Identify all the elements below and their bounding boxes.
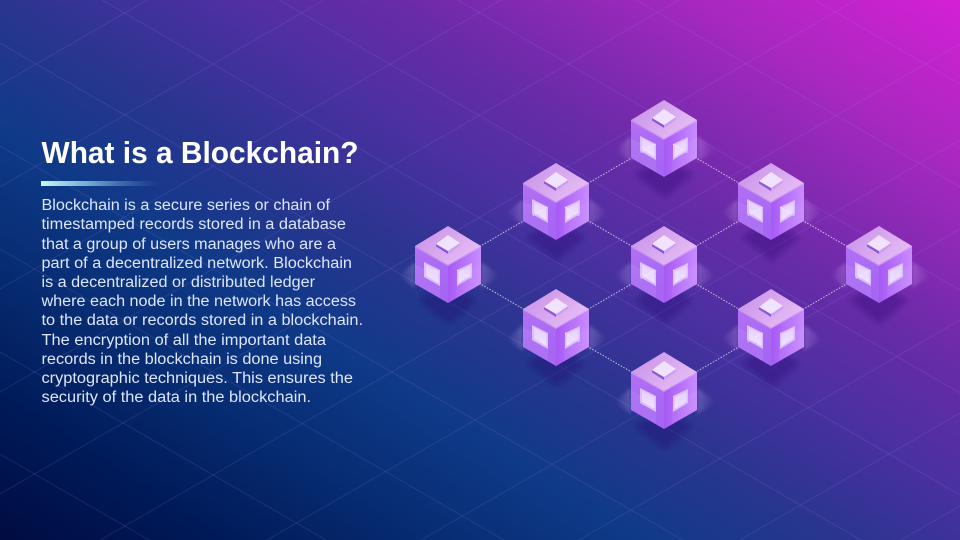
body paragraph: where each node in the network has access [40, 293, 356, 310]
cube node: far left [398, 226, 500, 324]
body paragraph: The encryption of all the important data [42, 332, 326, 349]
title: What is a Blockchain? [42, 135, 358, 170]
network connection lines [448, 139, 879, 391]
body paragraph: timestamped records stored in a database [42, 216, 346, 233]
cube node: upper left [506, 163, 608, 261]
body paragraph: is a decentralized or distributed ledger [42, 274, 315, 291]
body paragraph: Blockchain is a secure series or chain of [42, 197, 331, 214]
cube node: lower right [721, 289, 823, 387]
body paragraph [40, 197, 363, 406]
body paragraph: to the data or records stored in a blockchain. [42, 312, 363, 329]
body paragraph: records in the blockchain is done using [42, 351, 322, 368]
body paragraph: cryptographic techniques. This ensures the [42, 370, 353, 387]
body paragraph: that a group of users manages who are a [42, 236, 336, 253]
cube node: center [614, 226, 716, 324]
cube node: lower left [506, 289, 608, 387]
title underline accent [41, 181, 159, 186]
body paragraph: security of the data in the blockchain. [42, 389, 311, 406]
cube node: bottom [614, 352, 716, 450]
body paragraph: part of a decentralized network. Blockchain [42, 255, 352, 272]
cube node: far right [829, 226, 931, 324]
cube node: top [614, 100, 716, 198]
cube node: upper right [721, 163, 823, 261]
